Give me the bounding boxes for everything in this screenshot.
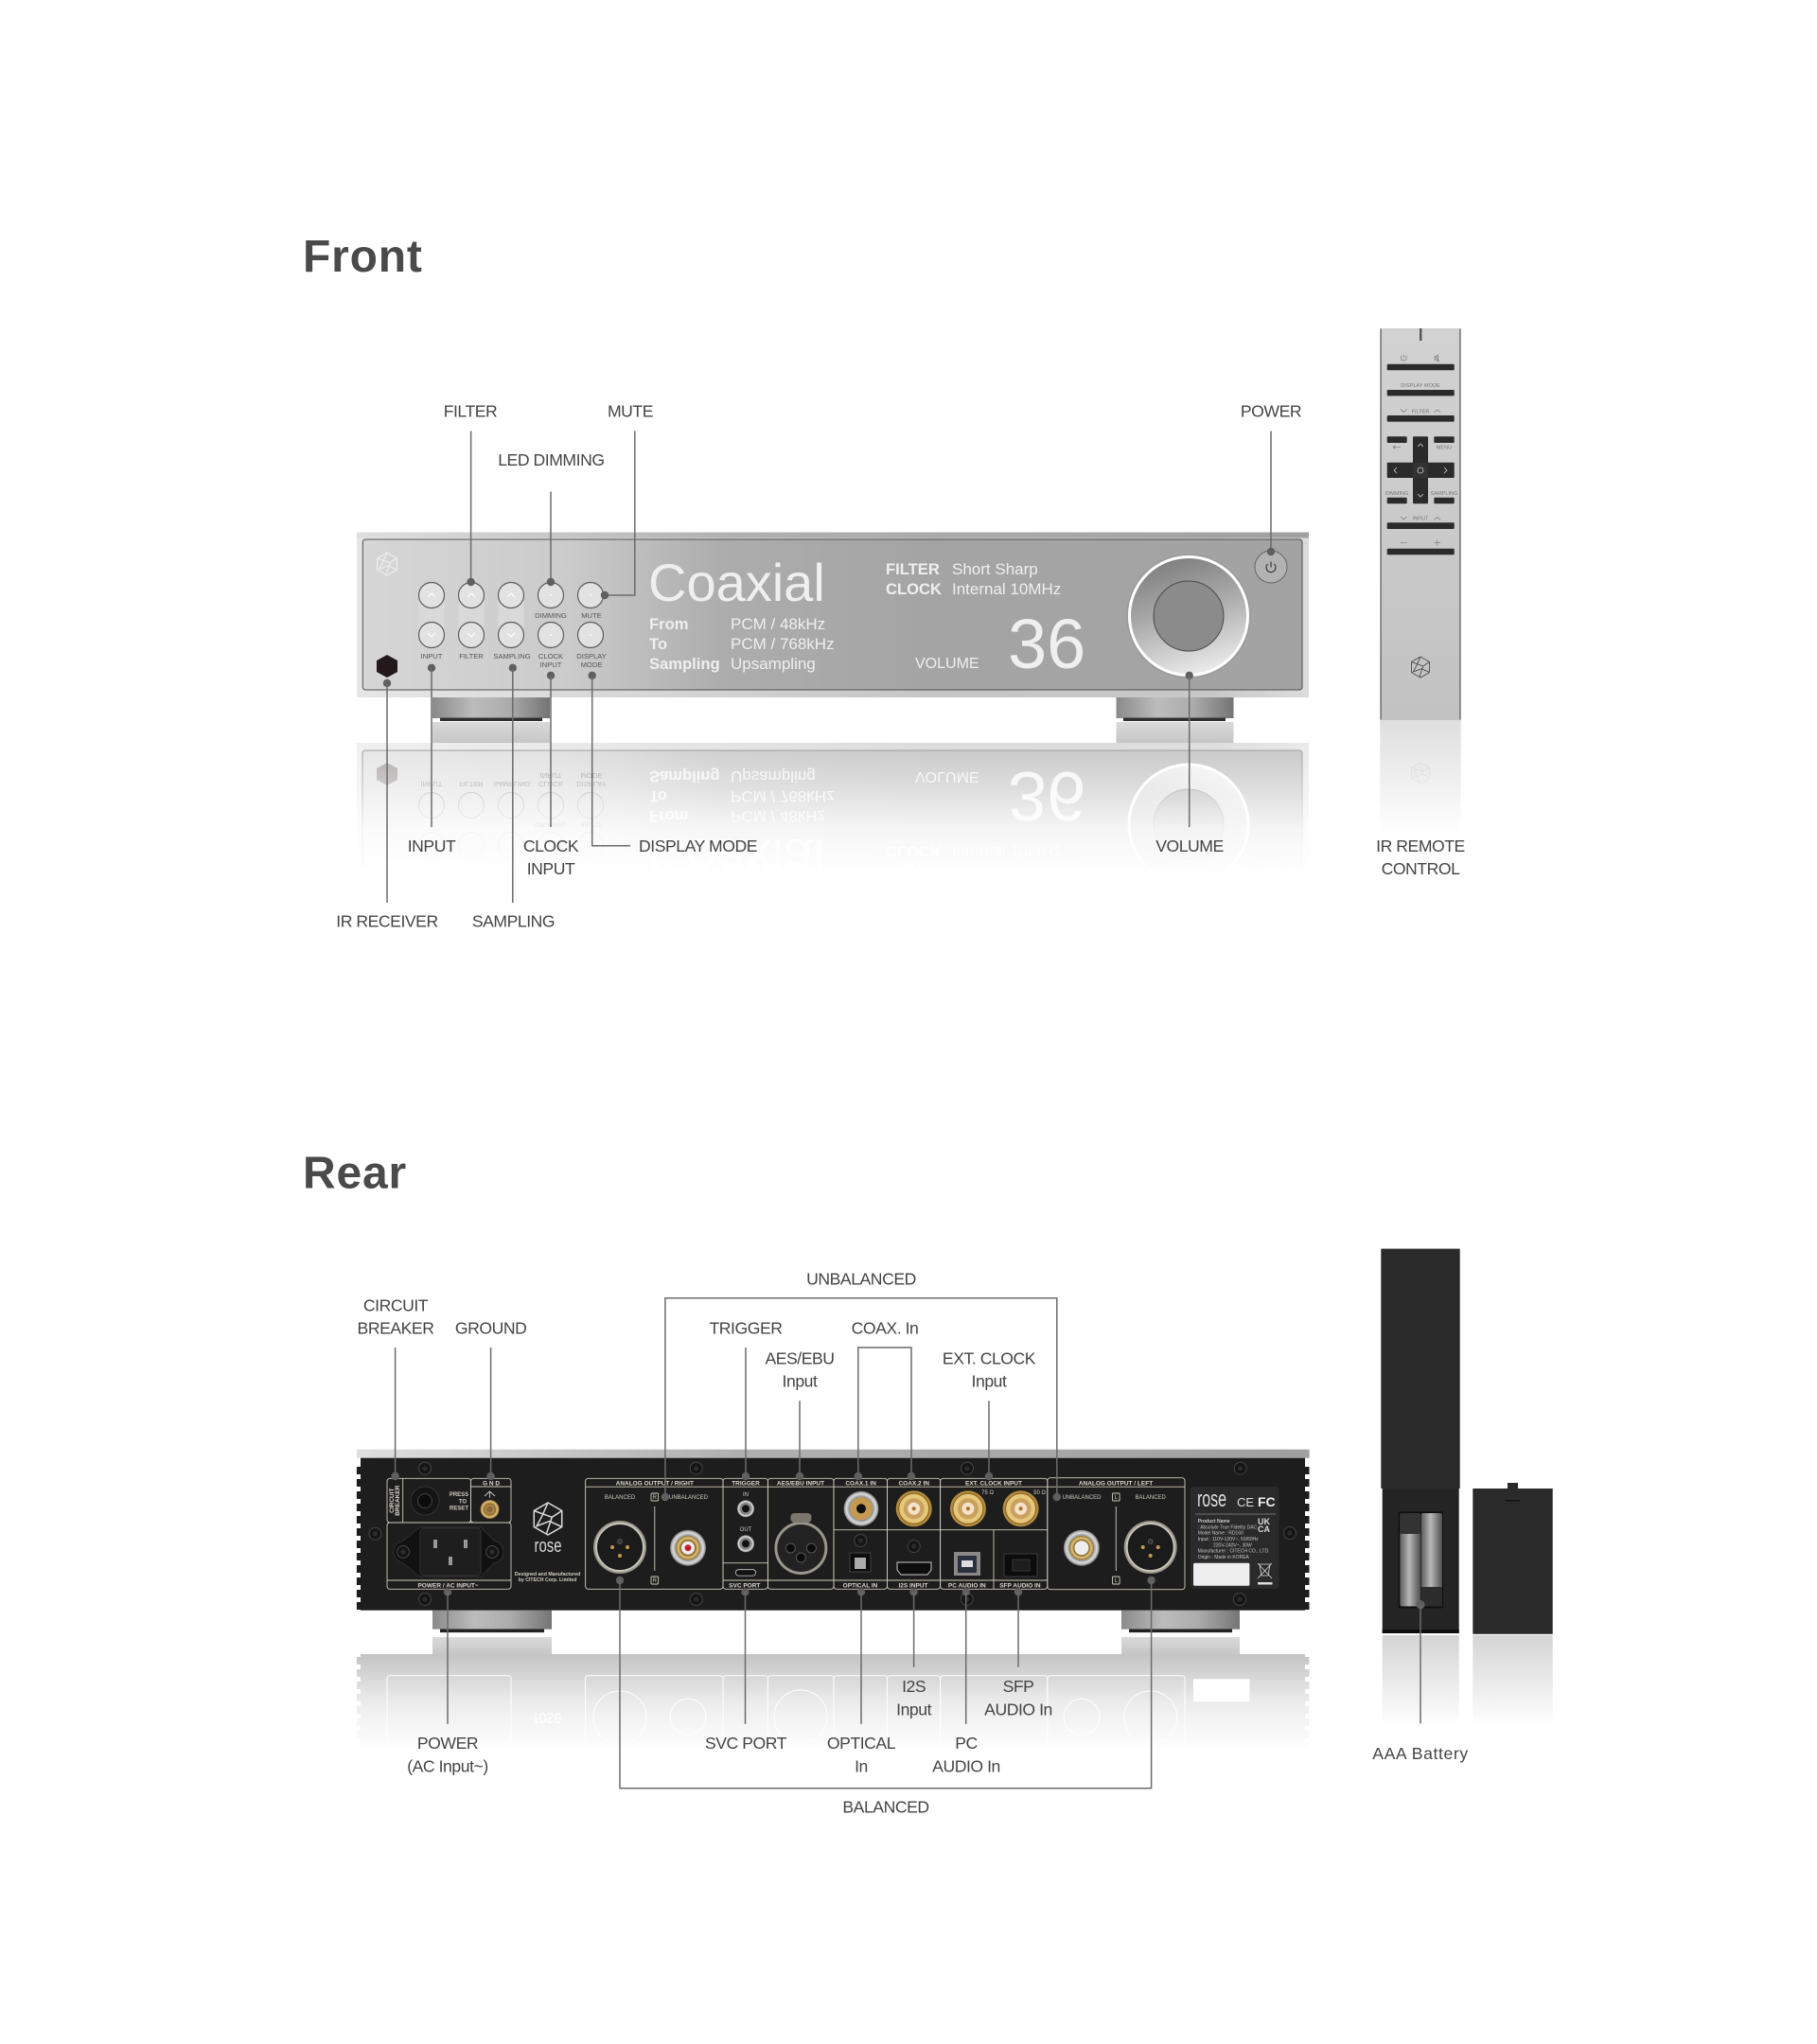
remote legends: INPUT: [1413, 517, 1429, 522]
callout: IR REMOTE CONTROL: CONTROL: [1382, 859, 1460, 878]
callout: EXT. CLOCK Input: EXT. CLOCK: [943, 1349, 1036, 1368]
silk-screen headers: BALANCED: [605, 1495, 636, 1501]
silk-screen headers: UNBALANCED: [669, 1495, 709, 1501]
silk-screen headers: [389, 1480, 1167, 1590]
connector: unbalanced left: [1064, 1530, 1100, 1566]
remote legends: MENU: [1437, 446, 1452, 451]
display: signal info: Upsampling: [731, 655, 816, 673]
rear unit: [357, 1450, 1310, 1611]
button legends: MODE: [581, 661, 602, 669]
callout: IR REMOTE CONTROL: IR REMOTE: [1376, 837, 1465, 855]
button pills: [418, 595, 524, 635]
display: filter and clock: Short Sharp: [952, 560, 1038, 578]
silk-screen headers: R: [653, 1578, 658, 1584]
callout: COAX. In: [852, 1319, 918, 1480]
connector: USB-B: [954, 1552, 980, 1576]
button legends: [421, 611, 607, 669]
silk-screen headers: COAX.2 IN: [898, 1480, 929, 1488]
callout: VOLUME: VOLUME: [1155, 837, 1224, 855]
silk-screen headers: R: [653, 1495, 658, 1501]
reflection: front unit: Upsampling: [731, 767, 816, 785]
connector: external clock 50 ohm: [1003, 1490, 1039, 1526]
circuit breaker: [411, 1487, 439, 1515]
button legends: MUTE: [581, 611, 602, 620]
silk-screen headers: OUT: [740, 1527, 752, 1533]
display: filter and clock: CLOCK: [886, 580, 942, 598]
connector: AES/EBU: [774, 1513, 827, 1575]
callout: SVC PORT: [705, 1588, 787, 1753]
foot: rear left: [432, 1611, 552, 1654]
reflection: front unit: DISPLAY: [576, 780, 607, 788]
silk-screen headers: L: [1115, 1578, 1119, 1584]
silk-screen headers: PRESS: [450, 1492, 468, 1498]
reflection: front unit: FILTER: [886, 862, 940, 880]
reflection: front unit: INPUT: [540, 771, 562, 780]
display: signal info: PCM / 48kHz: [731, 615, 825, 633]
callout: SVC PORT: SVC PORT: [705, 1734, 787, 1753]
silk-screen headers: 75 Ω: [981, 1490, 995, 1496]
callout: LED DIMMING: LED DIMMING: [498, 450, 605, 469]
callout: OPTICAL In: [827, 1588, 896, 1775]
connector: HDMI I2S: [897, 1541, 931, 1575]
callout: FILTER: FILTER: [444, 401, 497, 420]
display: signal info: From: [649, 615, 688, 633]
volume knob: [1127, 555, 1250, 678]
silk-screen headers: PC AUDIO IN: [948, 1582, 986, 1590]
remote legends: DIMMING: [1385, 491, 1408, 497]
silk-screen headers: I2S INPUT: [898, 1582, 928, 1590]
callout: GROUND: GROUND: [455, 1319, 526, 1338]
callout: SFP AUDIO In: [984, 1588, 1052, 1718]
product label: : Absolute True Fidelity DAC: [1198, 1524, 1258, 1530]
callout: EXT. CLOCK Input: [943, 1349, 1036, 1480]
product label: UK: [1258, 1517, 1270, 1526]
product label: Origin : Made in KOREA: [1198, 1555, 1250, 1560]
silk-screen headers: UNBALANCED: [1062, 1495, 1102, 1501]
silk-screen headers: RESET: [450, 1507, 468, 1512]
button legends: DIMMING: [535, 611, 567, 620]
rose logo and manufacturer note: [515, 1503, 580, 1583]
callout: POWER: [1241, 401, 1301, 555]
callout: DISPLAY MODE: [589, 672, 757, 855]
foot: front left: [432, 697, 550, 743]
callout: I2S Input: [896, 1588, 932, 1718]
IR window: [1420, 328, 1421, 341]
callout: VOLUME: [1155, 672, 1224, 855]
callout: BALANCED: BALANCED: [842, 1797, 929, 1816]
display: signal info: Sampling: [649, 655, 720, 673]
reflection: front unit: Sampling: [649, 767, 720, 785]
callout: CLOCK INPUT: [523, 672, 579, 878]
display: signal info: To: [649, 635, 667, 653]
silk-screen headers: EXT. CLOCK INPUT: [965, 1480, 1022, 1488]
product label: 220V-240V~, 30W: [1213, 1542, 1252, 1548]
silk-screen headers: BREAKER: [395, 1485, 401, 1516]
callout: GROUND: [455, 1319, 526, 1480]
silk-screen headers: L: [1115, 1495, 1119, 1501]
battery cavity: [1399, 1512, 1443, 1608]
callout: PC AUDIO In: PC: [955, 1734, 979, 1753]
product label: Model Name : RD160: [1198, 1530, 1244, 1536]
battery compartment view of remote: [1381, 1249, 1460, 1633]
callout: IR REMOTE CONTROL: [1376, 837, 1465, 878]
button legends: FILTER: [459, 652, 484, 661]
reflection: front unit: MUTE: [581, 820, 602, 829]
callout: SAMPLING: SAMPLING: [472, 912, 555, 931]
callout: MUTE: MUTE: [608, 401, 653, 420]
product label: [1191, 1487, 1279, 1589]
product label: Manufacturer : CITECH CO., LTD.: [1198, 1549, 1269, 1555]
foot: front right: [1117, 697, 1234, 743]
callout: AAA Battery: [1372, 1600, 1469, 1763]
reflection: front unit: To: [649, 787, 667, 805]
black chassis: [361, 1458, 1305, 1611]
callout: COAX. In: COAX. In: [852, 1319, 918, 1338]
remote upper body: [1381, 1249, 1460, 1489]
callout: AAA Battery: AAA Battery: [1372, 1744, 1469, 1763]
ground terminal: [481, 1491, 500, 1519]
reflection: front unit: CLOCK: [886, 842, 942, 860]
button legends: CLOCK: [538, 652, 563, 661]
callout: UNBALANCED: UNBALANCED: [806, 1269, 916, 1288]
button legends: INPUT: [421, 652, 443, 661]
remote body: [1380, 328, 1461, 720]
callout: POWER AC Input: [407, 1588, 488, 1775]
button legends: INPUT: [540, 661, 562, 669]
product label: FC: [1258, 1494, 1276, 1509]
silk-screen headers: SFP AUDIO IN: [999, 1582, 1041, 1590]
silk-screen headers: COAX.1 IN: [845, 1480, 876, 1488]
callout: I2S Input: Input: [896, 1700, 932, 1718]
callout: EXT. CLOCK Input: Input: [972, 1372, 1007, 1391]
display: volume: VOLUME: [915, 656, 979, 672]
reflection: front unit: DIMMING: [535, 820, 567, 829]
callout: CIRCUIT BREAKER: BREAKER: [358, 1319, 433, 1338]
silk-screen headers: TO: [459, 1499, 467, 1505]
silk-screen headers: SVC PORT: [729, 1582, 760, 1590]
silk-screen headers: TRIGGER: [732, 1480, 760, 1488]
callout: POWER AC Input: POWER: [417, 1734, 478, 1753]
reflection: front unit: CLOCK: [538, 780, 563, 788]
front buttons: [418, 583, 604, 647]
callout: LED DIMMING: [498, 450, 605, 586]
chassis screws: [369, 1462, 1296, 1605]
silk-screen headers: CIRCUIT: [389, 1488, 396, 1513]
foot: rear right: [1121, 1611, 1240, 1654]
reflection: front unit: MODE: [581, 771, 602, 780]
icon: rose logo: [378, 553, 397, 575]
callout: POWER AC Input: (AC Input~): [407, 1756, 488, 1775]
display: volume: 36: [1008, 605, 1085, 683]
reflection: front unit: Coaxial: [648, 828, 825, 888]
heading: Rear: Rear: [303, 1149, 407, 1199]
product label: CA: [1258, 1524, 1270, 1534]
silk-screen headers: ANALOG OUTPUT / RIGHT: [616, 1480, 694, 1488]
callout: DISPLAY MODE: DISPLAY MODE: [639, 837, 757, 855]
silk-screen headers: POWER / AC INPUT~: [417, 1582, 479, 1590]
display: volume: [915, 605, 1085, 683]
connector: coax 1: [844, 1491, 878, 1526]
connector: SVC USB-C: [736, 1570, 755, 1576]
callout: I2S Input: I2S: [902, 1677, 926, 1696]
callout: IR RECEIVER: [336, 679, 438, 931]
product label: Product Name: [1198, 1519, 1230, 1524]
reflection: front unit: [357, 743, 1309, 854]
reflection: front unit: PCM / 48kHz: [731, 807, 825, 825]
callout: SAMPLING: [472, 664, 555, 931]
remote legends: DISPLAY MODE: [1401, 383, 1440, 389]
reflection: front unit: VOLUME: [915, 768, 979, 784]
display panel: [362, 539, 1302, 690]
heading: Front: Front: [303, 232, 423, 282]
callout: INPUT: [408, 664, 456, 855]
callout: TRIGGER: [709, 1319, 783, 1480]
front unit: [357, 532, 1309, 697]
callout: PC AUDIO In: [932, 1588, 1000, 1775]
icon: remote logo: [1411, 657, 1430, 678]
silk-screen headers: PUSH: [793, 1515, 808, 1521]
callout: BALANCED: [616, 1577, 1155, 1816]
callout: TRIGGER: TRIGGER: [709, 1319, 783, 1338]
remote legends: FILTER: [1412, 409, 1429, 414]
callout: SFP AUDIO In: AUDIO In: [984, 1700, 1052, 1718]
display: signal info: [649, 615, 835, 673]
reflection: rear unit: rose: [534, 1708, 562, 1729]
product label: CE: [1237, 1495, 1254, 1509]
connector: balanced left: [1124, 1521, 1177, 1574]
connector: coax 2: [896, 1490, 932, 1526]
button legends: DISPLAY: [576, 652, 607, 661]
reflection: battery cover: [1473, 1635, 1553, 1727]
callout: CLOCK INPUT: CLOCK: [523, 837, 579, 855]
reflection: front unit: 36: [1008, 757, 1085, 836]
connector: optical: [850, 1535, 871, 1572]
IR remote control: [1380, 328, 1461, 720]
icon: IR receiver window: [377, 655, 397, 678]
reflection: front unit: FILTER: [459, 780, 484, 788]
callout: OPTICAL In: OPTICAL: [827, 1734, 896, 1753]
silk-screen headers: G N D: [483, 1480, 500, 1488]
connector: external clock 75 ohm: [950, 1490, 986, 1526]
callout: UNBALANCED: [662, 1269, 1061, 1501]
product label: rose: [1197, 1487, 1226, 1512]
silk-screen headers: IN: [743, 1492, 749, 1498]
callout: AES/EBU Input: [765, 1349, 835, 1480]
display: input name: Coaxial: [648, 553, 825, 612]
product label: Input : 110V-120V~, 50/60Hz: [1198, 1537, 1259, 1542]
silk-screen headers: AES/EBU INPUT: [777, 1480, 824, 1488]
reflection: front unit: SAMPLING: [493, 780, 531, 788]
display: filter and clock: FILTER: [886, 560, 940, 578]
callout: MUTE: [601, 401, 653, 599]
callout: INPUT: INPUT: [408, 837, 456, 855]
button legends: SAMPLING: [493, 652, 531, 661]
callout: CIRCUIT BREAKER: CIRCUIT: [363, 1295, 429, 1314]
silk-screen headers: BALANCED: [1136, 1495, 1167, 1501]
remote legends: [1385, 354, 1457, 546]
rose logo and manufacturer note: rose: [534, 1536, 562, 1557]
remote bar buttons: [1387, 364, 1455, 555]
callout: IR RECEIVER: IR RECEIVER: [336, 912, 438, 931]
callout: POWER: POWER: [1241, 401, 1301, 420]
connector: trigger jacks: [737, 1500, 754, 1552]
reflection: front unit: INPUT: [421, 780, 443, 788]
connector: SFP: [1004, 1554, 1037, 1577]
callout: CLOCK INPUT: INPUT: [527, 859, 575, 878]
callout: FILTER: [444, 401, 497, 586]
silk-screen panel outlines: [387, 1478, 1185, 1590]
chassis: [357, 532, 1309, 697]
AAA batteries: [1400, 1513, 1442, 1607]
remote d-pad: [1387, 436, 1455, 503]
reflection: IR remote: [1380, 720, 1461, 804]
callout: SFP AUDIO In: SFP: [1003, 1677, 1033, 1696]
rose logo and manufacturer note: by CITECH Corp. Limited: [519, 1577, 576, 1583]
power button: [1255, 551, 1287, 583]
display: signal info: PCM / 768kHz: [731, 635, 835, 653]
reflection: front unit: Short Sharp: [952, 862, 1038, 880]
connector: balanced right: [593, 1521, 646, 1574]
reflection: front unit: PCM / 768kHz: [731, 787, 835, 805]
callout: OPTICAL In: In: [855, 1756, 868, 1775]
AC power inlet: [394, 1527, 503, 1577]
reflection: front unit: Internal 10MHz: [952, 842, 1061, 860]
battery cover: [1473, 1483, 1553, 1634]
heat-sink fins: [359, 1467, 1307, 1611]
top plate: [357, 1450, 1310, 1458]
rose logo and manufacturer note: Designed and Manufactured: [515, 1572, 580, 1577]
reflection: remote back: [1383, 1635, 1459, 1727]
reflection: front unit: From: [649, 807, 688, 825]
silk-screen headers: ANALOG OUTPUT / LEFT: [1079, 1480, 1153, 1488]
silk-screen headers: OPTICAL IN: [843, 1582, 878, 1590]
reflection: rear unit: [357, 1654, 1310, 1728]
silk-screen headers: 50 Ω: [1033, 1490, 1047, 1496]
remote lower body: [1383, 1489, 1459, 1633]
callout: AES/EBU Input: AES/EBU: [765, 1349, 835, 1368]
display: filter and clock: Internal 10MHz: [952, 580, 1061, 598]
display: filter and clock: [886, 560, 1061, 598]
callout: CIRCUIT BREAKER: [358, 1295, 433, 1480]
remote legends: SAMPLING: [1431, 491, 1457, 497]
connector: unbalanced right: [670, 1530, 706, 1566]
callout: AES/EBU Input: Input: [783, 1372, 818, 1391]
callout: PC AUDIO In: AUDIO In: [932, 1756, 1000, 1775]
